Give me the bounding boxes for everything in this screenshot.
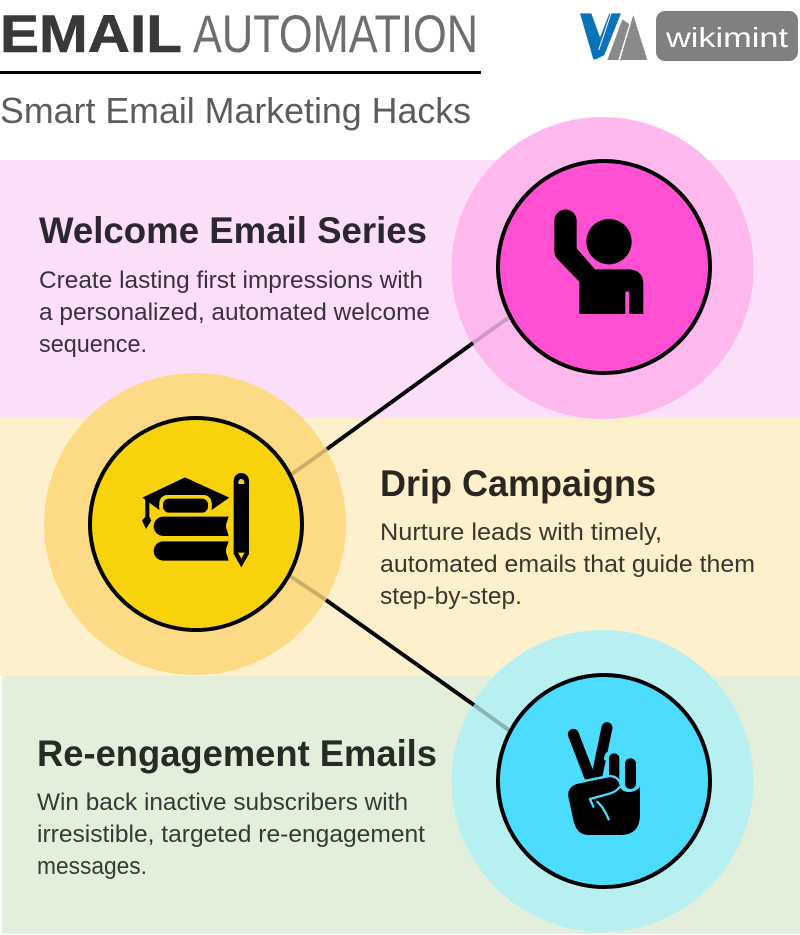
- background band: green: [2, 676, 800, 934]
- body: [380, 519, 755, 610]
- title: [0, 5, 478, 64]
- background band: pink: [0, 160, 800, 418]
- panel text: Welcome Email Series: [39, 210, 430, 358]
- icon: victory hand: [568, 728, 640, 835]
- logo: wikimint: [665, 22, 788, 53]
- outer circle: pink: [452, 117, 754, 419]
- panel text: Re-engagement Emails: [37, 733, 437, 880]
- inner circle: pink: [498, 161, 710, 373]
- title: AUTOMATION: [193, 5, 478, 64]
- logo mark: [580, 13, 647, 60]
- logo badge: [656, 11, 798, 61]
- body: Nurture leads with timely,: [380, 519, 662, 546]
- heading: Welcome Email Series: [39, 210, 427, 251]
- header: [0, 5, 798, 131]
- outer circle: blue: [452, 630, 754, 932]
- logo: [580, 11, 798, 61]
- body: step-by-step.: [380, 583, 522, 610]
- body: irresistible, targeted re-engagement: [37, 821, 425, 848]
- body: automated emails that guide them: [380, 551, 755, 578]
- heading: Re-engagement Emails: [37, 733, 437, 774]
- body: sequence.: [39, 331, 147, 358]
- subtitle: Smart Email Marketing Hacks: [0, 90, 471, 131]
- icon: graduation cap, books and pencil: [142, 473, 249, 567]
- inner circle: yellow: [90, 418, 302, 630]
- body: [37, 789, 425, 880]
- body: a personalized, automated welcome: [39, 299, 430, 326]
- body: [39, 267, 430, 358]
- connector: yellow to pink: [292, 318, 508, 474]
- icon: raised hand person: [554, 209, 643, 314]
- body: messages.: [37, 853, 147, 880]
- connector: yellow to blue: [290, 576, 510, 731]
- outer circle: yellow: [44, 373, 346, 675]
- heading: Drip Campaigns: [380, 463, 656, 504]
- body: Create lasting first impressions with: [39, 267, 423, 294]
- inner circle: blue: [498, 675, 710, 887]
- panel text: Drip Campaigns: [380, 463, 755, 610]
- background band: yellow: [0, 418, 800, 676]
- body: Win back inactive subscribers with: [37, 789, 408, 816]
- title: EMAIL: [0, 5, 182, 64]
